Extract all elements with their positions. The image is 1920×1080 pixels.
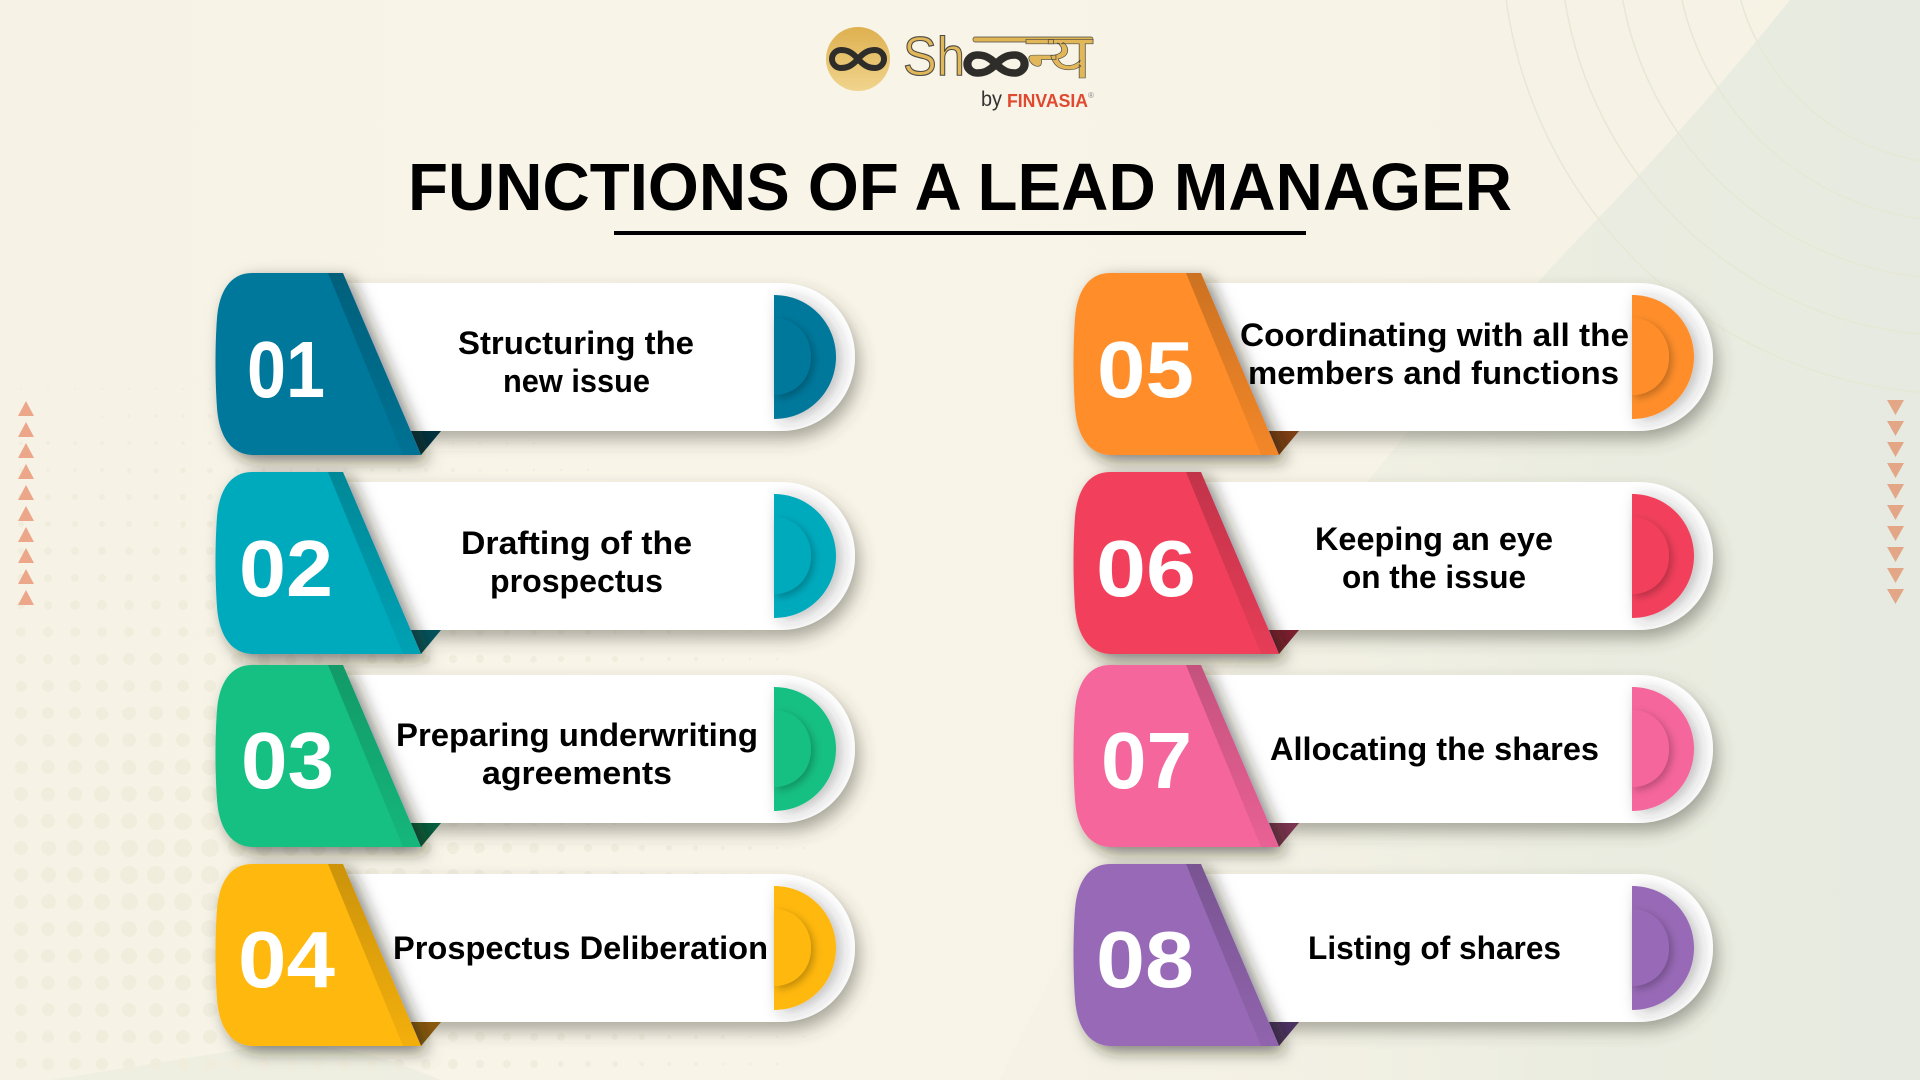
card 08 tab	[1074, 864, 1279, 1046]
card 05 number: 05	[1097, 325, 1194, 414]
card 02 inner half circle	[774, 517, 811, 594]
card 06 number: 06	[1096, 524, 1196, 613]
card 05 fold	[1269, 431, 1299, 455]
card 08	[1074, 864, 1713, 1046]
card 07 fold	[1269, 823, 1299, 847]
card 06 fold	[1269, 630, 1299, 654]
left triangles column	[18, 401, 34, 605]
card 08 fold	[1269, 1022, 1299, 1046]
card 08 band	[1186, 864, 1279, 1046]
card 03 pill	[300, 675, 855, 823]
card 04 half circle	[774, 886, 836, 1010]
card 04 tab	[216, 864, 421, 1046]
card 03 text: Preparing underwriting	[396, 717, 758, 753]
card 03	[216, 665, 855, 847]
card 01 text: new issue	[503, 363, 650, 399]
card 06 pill	[1158, 482, 1713, 630]
logo wordmark Sh: Sh	[903, 25, 965, 87]
card 06 tab	[1074, 472, 1279, 654]
card 06 text: on the issue	[1342, 559, 1526, 595]
card 03 text: agreements	[482, 755, 672, 791]
halftone dots	[14, 469, 698, 1070]
card 02 text: Drafting of the	[461, 525, 692, 561]
card 05 band	[1186, 273, 1279, 455]
card 02	[216, 472, 855, 654]
card 07 band	[1186, 665, 1279, 847]
card 07 number: 07	[1101, 716, 1192, 805]
card 07 tab	[1074, 665, 1279, 847]
card 04 pill	[300, 874, 855, 1022]
title underline	[614, 231, 1306, 235]
card 02 number: 02	[239, 524, 333, 613]
card 08 inner half circle	[1632, 909, 1669, 986]
card 08 pill	[1158, 874, 1713, 1022]
title: FUNCTIONS OF A LEAD MANAGER	[408, 150, 1512, 225]
card 07 text: Allocating the shares	[1270, 731, 1599, 767]
card 06 half circle	[1632, 494, 1694, 618]
card 01 fold	[411, 431, 441, 455]
card 05 tab	[1074, 273, 1279, 455]
card 06 text: Keeping an eye	[1315, 521, 1553, 557]
card 05 text: Coordinating with all the	[1240, 317, 1629, 353]
card 07 pill	[1158, 675, 1713, 823]
card 04 number: 04	[238, 915, 336, 1004]
card 03 fold	[411, 823, 441, 847]
card 07	[1074, 665, 1713, 847]
card 03 number: 03	[241, 716, 334, 805]
card 03 tab	[216, 665, 421, 847]
logo headline bar	[973, 37, 1093, 42]
card 05	[1074, 273, 1713, 455]
card 05 inner half circle	[1632, 318, 1669, 395]
card 06 inner half circle	[1632, 517, 1669, 594]
card 01	[216, 273, 855, 455]
card 01 text: Structuring the	[458, 325, 694, 361]
bottom left background shape	[50, 1045, 440, 1080]
card 07 half circle	[1632, 687, 1694, 811]
card 02 half circle	[774, 494, 836, 618]
card 02 text: prospectus	[490, 563, 663, 599]
card 08 text: Listing of shares	[1308, 930, 1561, 966]
card 02 pill	[300, 482, 855, 630]
card 08 number: 08	[1096, 915, 1194, 1004]
card 01 inner half circle	[774, 318, 811, 395]
card 01 band	[328, 273, 421, 455]
background green curved shape	[1000, 0, 1920, 1080]
card 01 pill	[300, 283, 855, 431]
logo infinity	[967, 55, 1025, 73]
logo wordmark devanagari: न्य	[1026, 23, 1093, 92]
card 04 band	[328, 864, 421, 1046]
card 04	[216, 864, 855, 1046]
card 01 number: 01	[247, 325, 325, 414]
card 08 half circle	[1632, 886, 1694, 1010]
logo	[826, 23, 1094, 111]
card 05 pill	[1158, 283, 1713, 431]
card 04 text: Prospectus Deliberation	[393, 930, 768, 966]
logo icon: gold circle with infinity	[826, 27, 890, 91]
logo by: by	[981, 88, 1002, 111]
card 04 inner half circle	[774, 909, 811, 986]
card 06	[1074, 472, 1713, 654]
card 07 inner half circle	[1632, 710, 1669, 787]
card 02 band	[328, 472, 421, 654]
right triangles column	[1887, 400, 1904, 604]
card 06 band	[1186, 472, 1279, 654]
logo finvasia: FINVASIA	[1007, 91, 1088, 111]
card 02 fold	[411, 630, 441, 654]
card 01 tab	[216, 273, 421, 455]
card 01 half circle	[774, 295, 836, 419]
concentric arcs	[1506, 0, 1920, 392]
logo registered mark: ®	[1088, 91, 1094, 100]
card 02 tab	[216, 472, 421, 654]
card 04 fold	[411, 1022, 441, 1046]
card 03 half circle	[774, 687, 836, 811]
card 05 half circle	[1632, 295, 1694, 419]
card 03 band	[328, 665, 421, 847]
card 05 text: members and functions	[1248, 355, 1619, 391]
card 03 inner half circle	[774, 710, 811, 787]
